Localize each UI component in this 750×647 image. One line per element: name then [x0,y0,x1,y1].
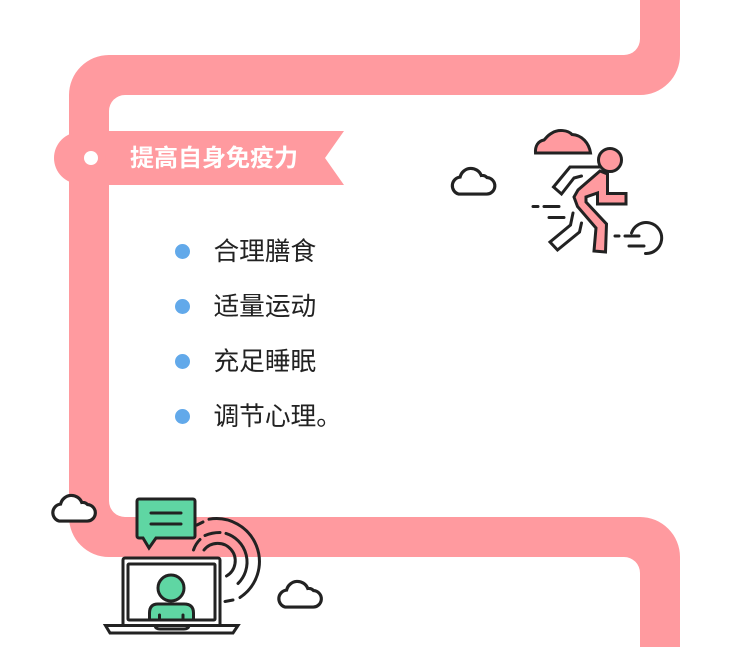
icon: runner [533,130,662,254]
icon: speech bubble [137,499,195,548]
list item: exercise: 适量运动 [214,292,316,320]
icon: outline cloud top [452,168,495,194]
icon: laptop [106,558,238,633]
list item: mental health: 调节心理。 [214,402,342,430]
icon: outline cloud left [53,495,95,521]
icon: outline cloud bottom [279,581,321,607]
list item: balanced diet: 合理膳食 [214,238,316,266]
list item: sleep: 充足睡眠 [214,348,316,376]
title: 提高自身免疫力 [130,145,298,172]
icon: signal arcs [194,519,259,602]
